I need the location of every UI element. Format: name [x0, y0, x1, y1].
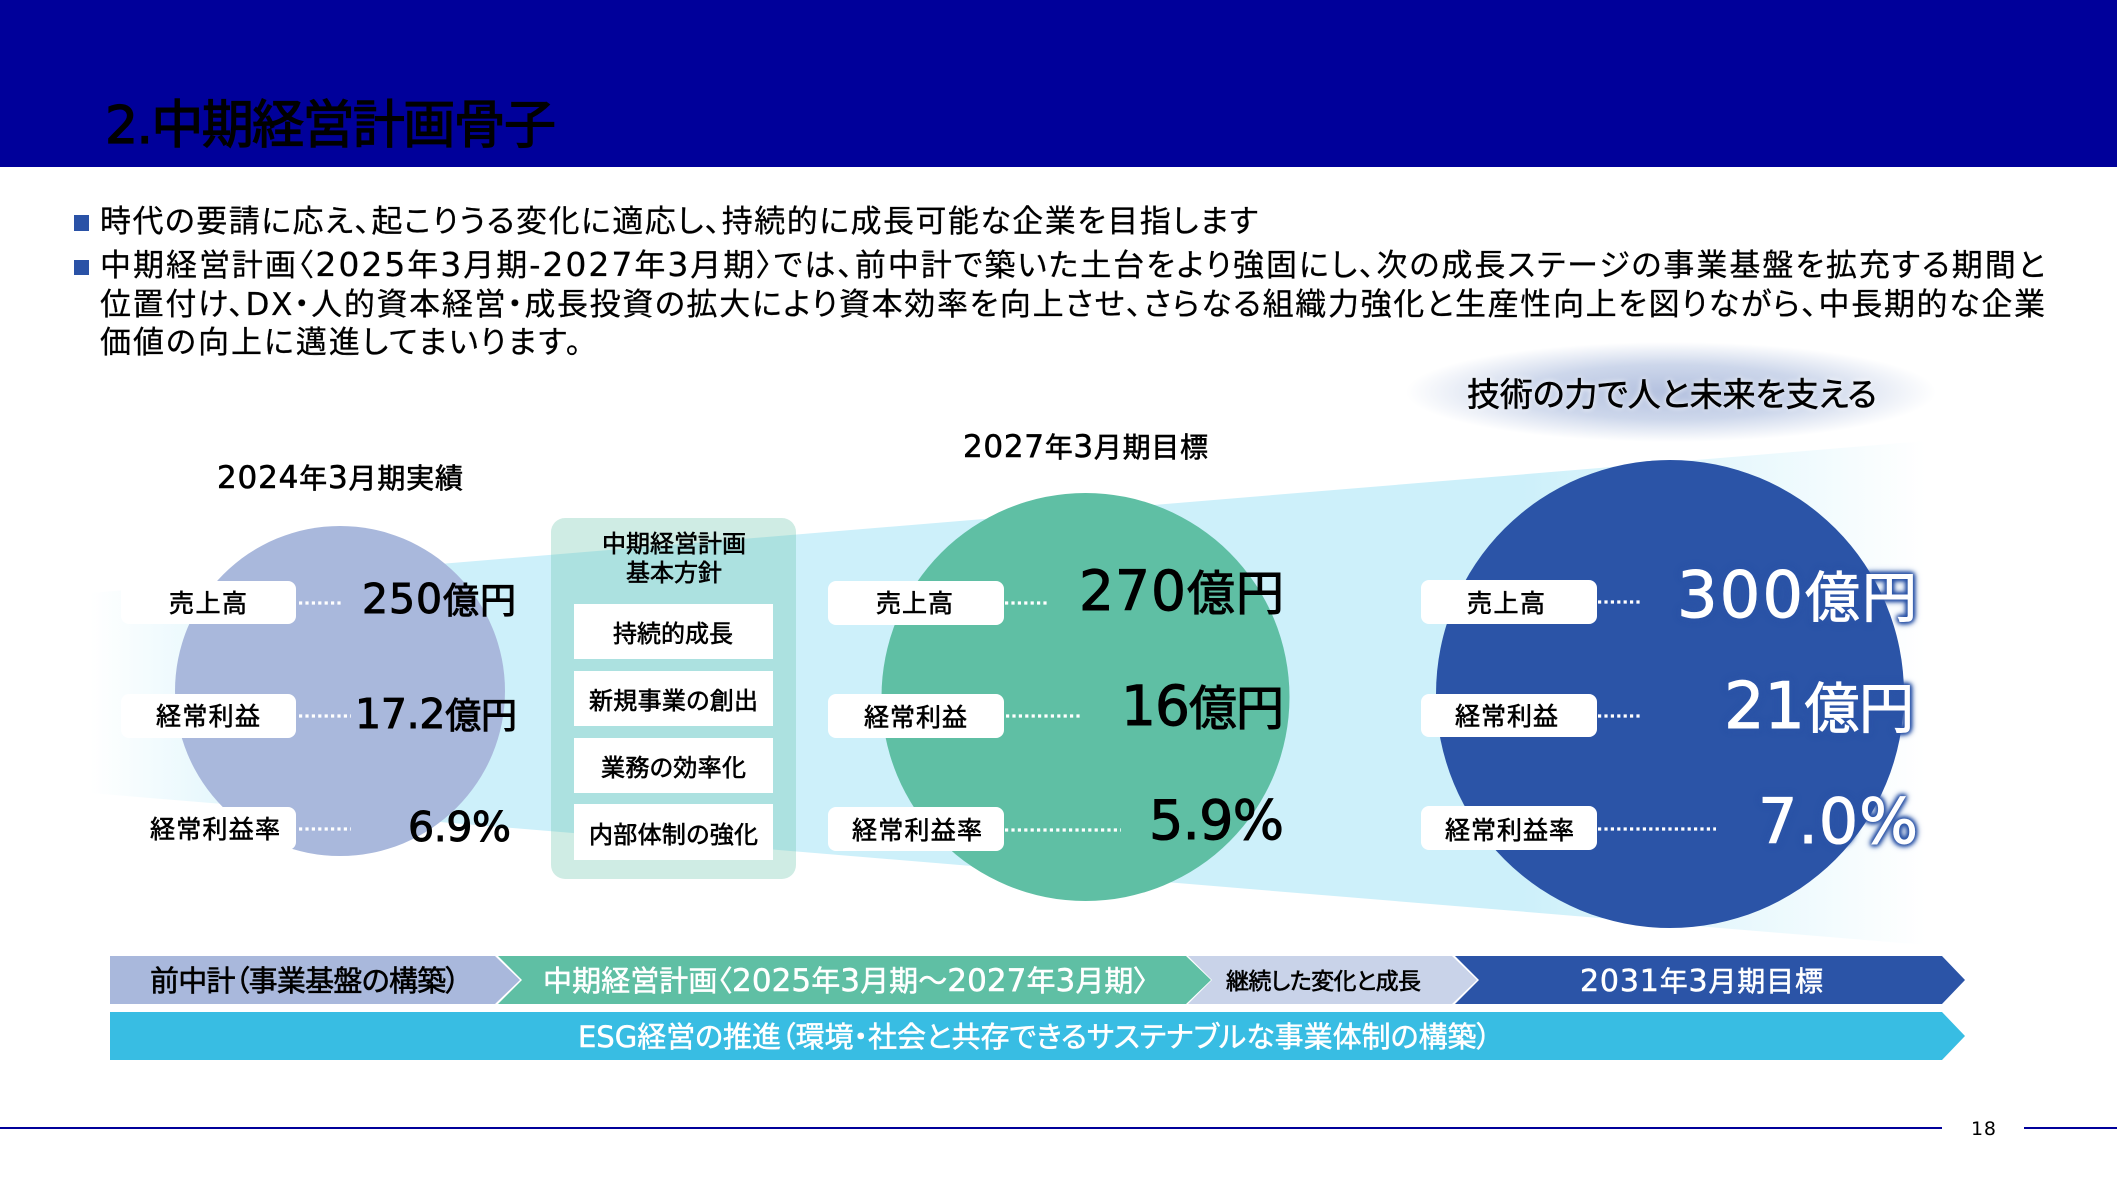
policy: new business	[574, 671, 773, 726]
growth funnel background	[90, 441, 1926, 945]
heading 2024: 2024年3月期実績	[217, 460, 463, 496]
policy: internal structure	[574, 804, 773, 860]
dotted leaders	[299, 603, 351, 829]
metric chip: sales	[1421, 580, 1597, 624]
panel: basic policy	[551, 518, 796, 879]
bullet text 2: 位置付け、DX・人的資本経営・成長投資の拡大により資本効率を向上させ、さらなる組織力強化と生産性向上を図りながら、中長期的な企業	[100, 287, 2045, 323]
circle 2024	[175, 526, 505, 856]
bullet text 1: 時代の要請に応え、起こりうる変化に適応し、持続的に成長可能な企業を目指します	[100, 204, 1258, 240]
title: 2.中期経営計画骨子	[105, 96, 556, 156]
policy: efficiency	[574, 738, 773, 793]
policy: internal structure: 内部体制の強化	[589, 821, 758, 849]
panel heading: 基本方針	[626, 559, 722, 587]
bullet list	[74, 204, 2045, 361]
dotted leaders	[1598, 602, 1716, 829]
bullet text 2: 中期経営計画〈2025年3月期-2027年3月期〉では、前中計で築いた土台をより強固にし、次の成長ステージの事業基盤を拡充する期間と	[100, 245, 2045, 284]
value: 5.9%: 5.9%	[1149, 789, 1284, 852]
metric chip: sales: 売上高	[876, 589, 953, 618]
metric chip: ordinary profit: 経常利益	[864, 703, 967, 732]
policy: efficiency: 業務の効率化	[601, 754, 746, 782]
panel heading: 中期経営計画	[602, 530, 746, 558]
panel heading	[602, 530, 746, 587]
arrow: 2031 target	[1455, 956, 1965, 1004]
bullet text 2	[100, 245, 2045, 361]
metric chip: ordinary profit margin	[1421, 806, 1597, 850]
policy: sustainable growth: 持続的成長	[613, 620, 733, 648]
metric chip: ordinary profit: 経常利益	[156, 702, 260, 731]
arrow: continued change: 継続した変化と成長	[1226, 969, 1421, 995]
page number: 18	[1971, 1118, 1996, 1140]
metric chip: sales	[828, 581, 1004, 625]
value: 17.2: 17.2億円	[355, 690, 517, 738]
column: 2027 target	[828, 429, 1290, 901]
arrow: 2031 target: 2031年3月期目標	[1580, 964, 1823, 999]
metric chip: sales	[121, 581, 296, 624]
bullet text 2: 価値の向上に邁進してまいります。	[100, 325, 581, 361]
metric chip: ordinary profit	[1421, 694, 1597, 737]
value: 7.0%: 7.0%	[1758, 785, 1918, 858]
footer rule	[0, 1127, 2117, 1129]
metric chip: ordinary profit	[121, 694, 296, 738]
arrow: ESG	[110, 1012, 1965, 1060]
column: 2031 target	[1421, 460, 1918, 928]
metric chip: ordinary profit margin: 経常利益率	[852, 816, 982, 845]
circle 2031	[1436, 460, 1904, 928]
dotted leaders	[1005, 603, 1121, 830]
column: 2024 results	[121, 460, 517, 856]
circle 2027	[882, 493, 1290, 901]
timeline arrows	[110, 956, 1965, 1060]
arrow: mid-term plan	[498, 956, 1211, 1004]
metric chip: ordinary profit margin: 経常利益率	[150, 815, 280, 844]
value: 6.9%: 6.9%	[408, 803, 511, 851]
value: 16: 16億円	[1121, 674, 1284, 738]
value: 21: 21億円	[1724, 670, 1914, 744]
policy: sustainable growth	[574, 604, 773, 659]
heading 2027: 2027年3月期目標	[963, 429, 1208, 465]
header band	[0, 0, 2117, 167]
slogan with halo: 技術の力で人と未来を支える	[1467, 375, 1877, 414]
arrow: previous plan: 前中計（事業基盤の構築）	[150, 964, 460, 998]
value: 250: 250億円	[362, 575, 516, 623]
value: 300: 300億円	[1677, 559, 1917, 633]
metric chip: ordinary profit margin: 経常利益率	[1445, 816, 1574, 845]
arrow: mid-term plan: 中期経営計画〈2025年3月期〜2027年3月期〉	[543, 963, 1148, 999]
metric chip: ordinary profit margin	[828, 807, 1004, 851]
arrow: previous plan	[110, 956, 520, 1004]
metric chip: sales: 売上高	[1467, 589, 1545, 618]
policy: new business: 新規事業の創出	[589, 687, 758, 715]
metric chip: ordinary profit margin	[121, 807, 296, 850]
bullet marker 1	[74, 215, 89, 231]
arrow: continued change	[1188, 956, 1477, 1004]
metric chip: sales: 売上高	[169, 589, 247, 618]
metric chip: ordinary profit	[828, 694, 1004, 738]
metric chip: ordinary profit: 経常利益	[1455, 702, 1558, 731]
arrow: ESG: ESG経営の推進（環境・社会と共存できるサステナブルな事業体制の構築）	[578, 1020, 1491, 1054]
slogan with halo	[1406, 342, 1936, 442]
value: 270: 270億円	[1079, 559, 1284, 623]
bullet marker 2	[74, 260, 89, 275]
